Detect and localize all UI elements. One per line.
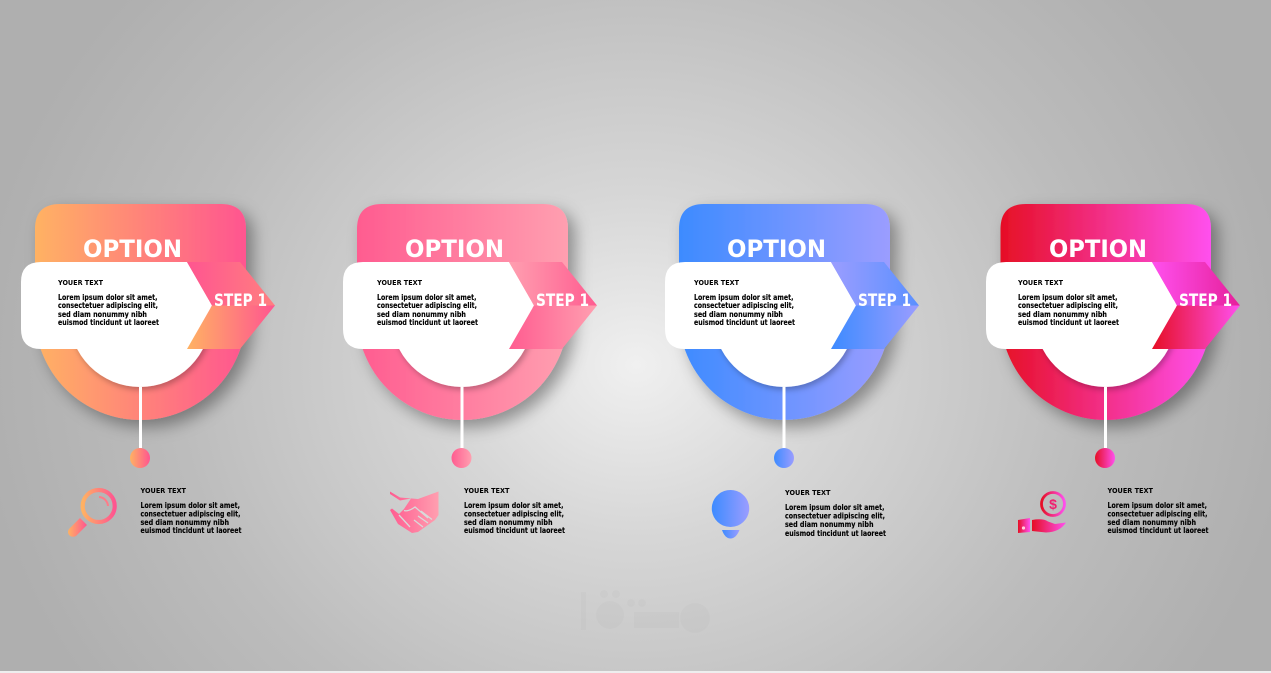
text block: consectetuer adipiscing elit, <box>377 301 477 310</box>
white text panel <box>343 262 534 349</box>
heading: option: OPTION <box>1049 235 1147 263</box>
connector line <box>782 387 786 448</box>
connector dot <box>1095 448 1115 468</box>
lower text block: euismod tincidunt ut laoreet <box>140 526 242 535</box>
heading: option: OPTION <box>405 235 504 263</box>
text block: YOUER TEXT <box>376 279 422 287</box>
lower text block: consectetuer adipiscing elit, <box>785 512 885 520</box>
connector dot <box>774 448 794 468</box>
white text panel <box>986 262 1177 349</box>
lower text block: Lorem ipsum dolor sit amet, <box>464 501 564 510</box>
text block: sed diam nonummy nibh <box>1018 310 1107 319</box>
white semicircle <box>1040 300 1176 393</box>
lower text block: Lorem ipsum dolor sit amet, <box>785 503 885 512</box>
lower text block: YOUER TEXT <box>784 489 831 497</box>
lower text block: sed diam nonummy nibh <box>140 518 229 527</box>
white semicircle <box>74 300 212 393</box>
lower text block: sed diam nonummy nibh <box>464 518 552 527</box>
white semicircle <box>396 300 534 393</box>
step arrow <box>831 262 919 349</box>
card body <box>1000 204 1211 420</box>
text block <box>376 279 478 327</box>
lower text block: euismod tincidunt ut laoreet <box>464 526 565 535</box>
lower text block <box>1107 487 1209 535</box>
step arrow: STEP 1 <box>858 291 911 310</box>
lower text block: consectetuer adipiscing elit, <box>464 510 564 518</box>
icon: light bulb <box>712 490 749 538</box>
text block: euismod tincidunt ut laoreet <box>58 318 159 327</box>
lower text block: YOUER TEXT <box>1107 487 1153 495</box>
text block <box>693 279 795 327</box>
connector line <box>460 387 464 448</box>
lower text block <box>784 489 886 538</box>
text block: sed diam nonummy nibh <box>58 310 147 319</box>
text block: Lorem ipsum dolor sit amet, <box>58 293 158 302</box>
panel: option card 1 <box>21 204 275 537</box>
lower text block: euismod tincidunt ut laoreet <box>1108 526 1209 535</box>
step arrow <box>1152 262 1240 349</box>
text block: consectetuer adipiscing elit, <box>58 301 158 310</box>
text block: euismod tincidunt ut laoreet <box>1018 318 1119 327</box>
card body <box>679 204 890 420</box>
text block: YOUER TEXT <box>693 279 739 287</box>
panel: option card 2 <box>343 204 597 535</box>
white text panel <box>665 262 856 349</box>
panel: option card 4 <box>986 204 1240 535</box>
icon: magnifying glass <box>68 490 115 537</box>
text block: YOUER TEXT <box>57 279 103 287</box>
step arrow: STEP 1 <box>214 291 267 310</box>
panel: option card 3 <box>665 204 919 538</box>
lower text block <box>140 487 242 535</box>
text block: sed diam nonummy nibh <box>377 310 466 319</box>
watermark <box>581 590 710 633</box>
connector dot <box>452 448 472 468</box>
connector line <box>1104 387 1107 448</box>
lower text block: sed diam nonummy nibh <box>785 520 874 529</box>
lower text block: consectetuer adipiscing elit, <box>1108 510 1208 518</box>
text block: YOUER TEXT <box>1017 279 1063 287</box>
heading: option: OPTION <box>83 235 182 263</box>
lower text block: sed diam nonummy nibh <box>1108 518 1196 527</box>
lower text block: euismod tincidunt ut laoreet <box>785 529 886 538</box>
white text panel <box>21 262 212 349</box>
card body <box>35 204 246 420</box>
lower text block <box>463 487 565 535</box>
lower text block: Lorem ipsum dolor sit amet, <box>140 501 240 510</box>
text block: consectetuer adipiscing elit, <box>694 301 794 310</box>
card body <box>357 204 568 420</box>
icon: hand with coin <box>1018 492 1066 533</box>
text block: consectetuer adipiscing elit, <box>1018 301 1118 310</box>
lower text block: Lorem ipsum dolor sit amet, <box>1108 501 1207 510</box>
text block <box>1017 279 1119 327</box>
step arrow: STEP 1 <box>536 291 589 310</box>
icon: handshake <box>390 492 438 533</box>
text block <box>57 279 159 327</box>
lower text block: consectetuer adipiscing elit, <box>140 510 241 518</box>
text block: euismod tincidunt ut laoreet <box>377 318 478 327</box>
text block: sed diam nonummy nibh <box>694 310 783 319</box>
step arrow <box>187 262 275 349</box>
text block: Lorem ipsum dolor sit amet, <box>377 293 477 302</box>
text block: Lorem ipsum dolor sit amet, <box>1018 293 1118 302</box>
lower text block: YOUER TEXT <box>140 487 186 495</box>
text block: euismod tincidunt ut laoreet <box>694 318 795 327</box>
text block: Lorem ipsum dolor sit amet, <box>694 293 794 302</box>
white semicircle <box>718 300 856 393</box>
step arrow <box>509 262 597 349</box>
icon: hand with coin: $ <box>1049 496 1057 512</box>
connector dot <box>130 448 150 468</box>
connector line <box>139 387 142 448</box>
lower text block: YOUER TEXT <box>463 487 510 495</box>
heading: option: OPTION <box>727 235 826 263</box>
step arrow: STEP 1 <box>1179 291 1232 310</box>
